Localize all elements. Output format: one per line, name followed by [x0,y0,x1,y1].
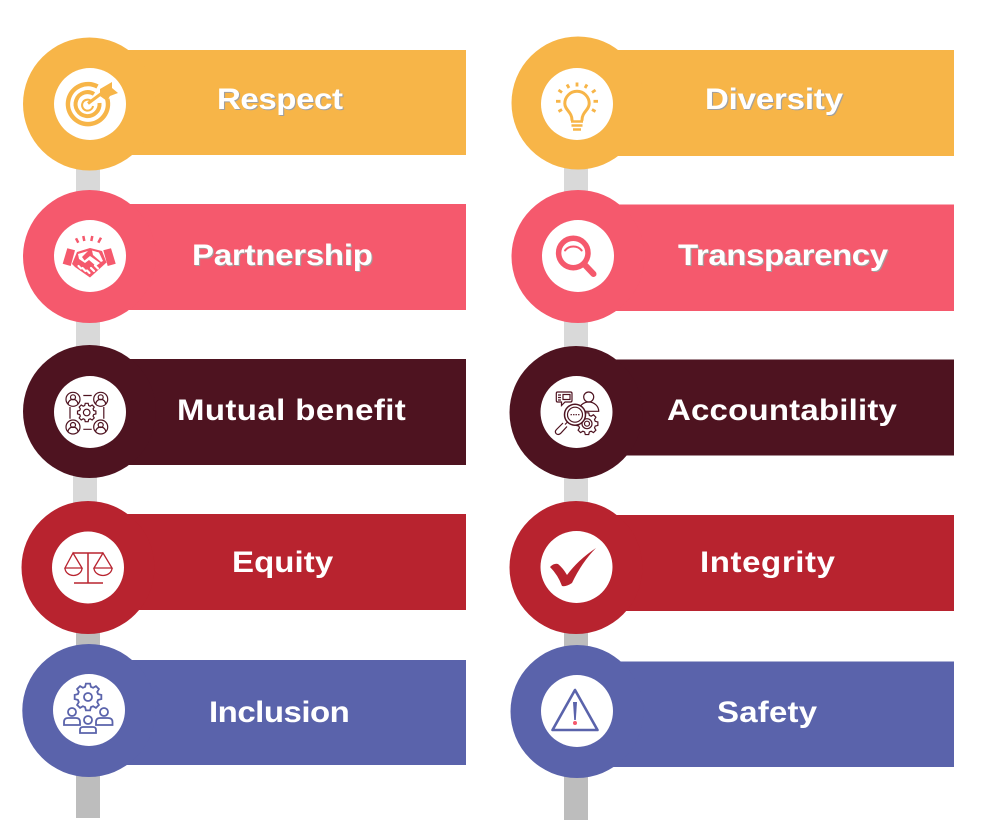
label: Safety: Safety [717,694,818,729]
label: Transparency: Transparency [678,237,889,272]
icon: gear and team [64,684,112,733]
icon: handshake [63,236,116,278]
label: Inclusion: Inclusion [209,694,350,729]
panel: Mutual benefit [23,345,466,478]
icon: balance scale [65,553,112,583]
label: Accountability: Accountability [667,392,897,427]
label: Integrity: Integrity [700,544,835,579]
panel: Transparency [512,190,954,323]
icon: light bulb [556,82,598,130]
icon: target [68,82,118,124]
label: Partnership: Partnership [192,237,373,272]
panel: Partnership [23,190,466,323]
label: Respect: Respect [217,81,343,116]
label: Diversity: Diversity [705,81,844,116]
icon: check mark [550,548,596,586]
panel: Inclusion [22,644,466,777]
left pole [73,160,100,818]
icon: magnifying glass [559,238,594,274]
label: Equity: Equity [232,544,334,579]
icon: people around gear [66,392,108,434]
panel: Safety [510,645,954,778]
icon: review with person, gear and magnifier [555,392,599,435]
icon: warning triangle [552,690,598,730]
right pole [564,160,588,820]
label: Mutual benefit: Mutual benefit [177,392,406,427]
panel: Diversity [512,36,954,170]
panel: Respect [23,38,466,170]
panel: Accountability [510,346,954,479]
panel: Equity [22,501,466,634]
panel: Integrity [510,501,954,634]
